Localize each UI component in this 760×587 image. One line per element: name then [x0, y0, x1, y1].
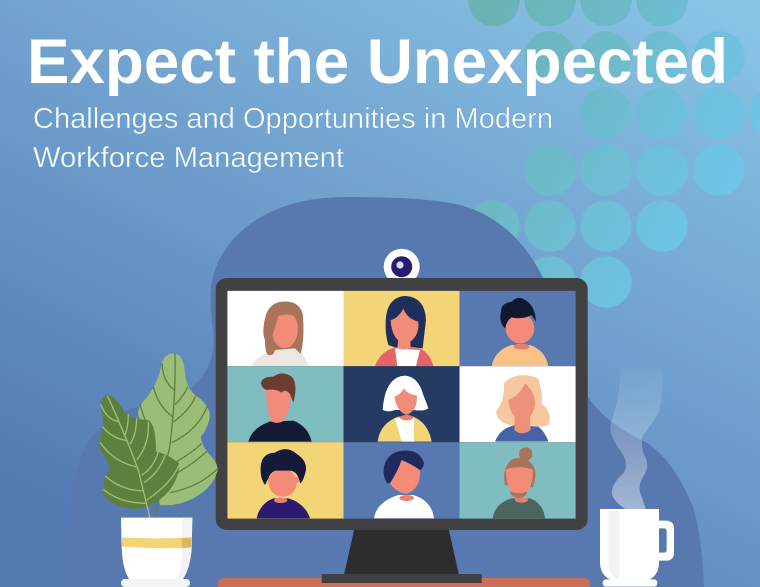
- dot pattern: [468, 0, 760, 308]
- subtitle: Workforce Management: [33, 142, 344, 174]
- person 7: [257, 449, 310, 518]
- title: Expect the Unexpected: [27, 27, 728, 97]
- desk: [218, 578, 590, 587]
- dark leaf: [100, 395, 179, 518]
- coffee mug: [600, 368, 674, 587]
- person 4: [248, 373, 312, 442]
- steam: [610, 368, 663, 509]
- plant: [100, 353, 218, 587]
- flower pot: [121, 518, 192, 587]
- person 9: [493, 447, 545, 518]
- mug body: [600, 509, 674, 587]
- person 5: [378, 376, 432, 442]
- video call grid: [227, 291, 576, 519]
- background blob: [68, 197, 704, 587]
- webcam: [384, 249, 420, 285]
- subtitle: [33, 103, 553, 174]
- subtitle: Challenges and Opportunities in Modern: [33, 103, 553, 135]
- person 1: [252, 301, 308, 366]
- monitor stand: [322, 529, 482, 583]
- person 6: [495, 375, 550, 442]
- person 8: [374, 451, 434, 518]
- monitor: [216, 278, 588, 530]
- person 3: [492, 298, 548, 366]
- light leaf: [138, 353, 218, 517]
- person 2: [375, 296, 433, 366]
